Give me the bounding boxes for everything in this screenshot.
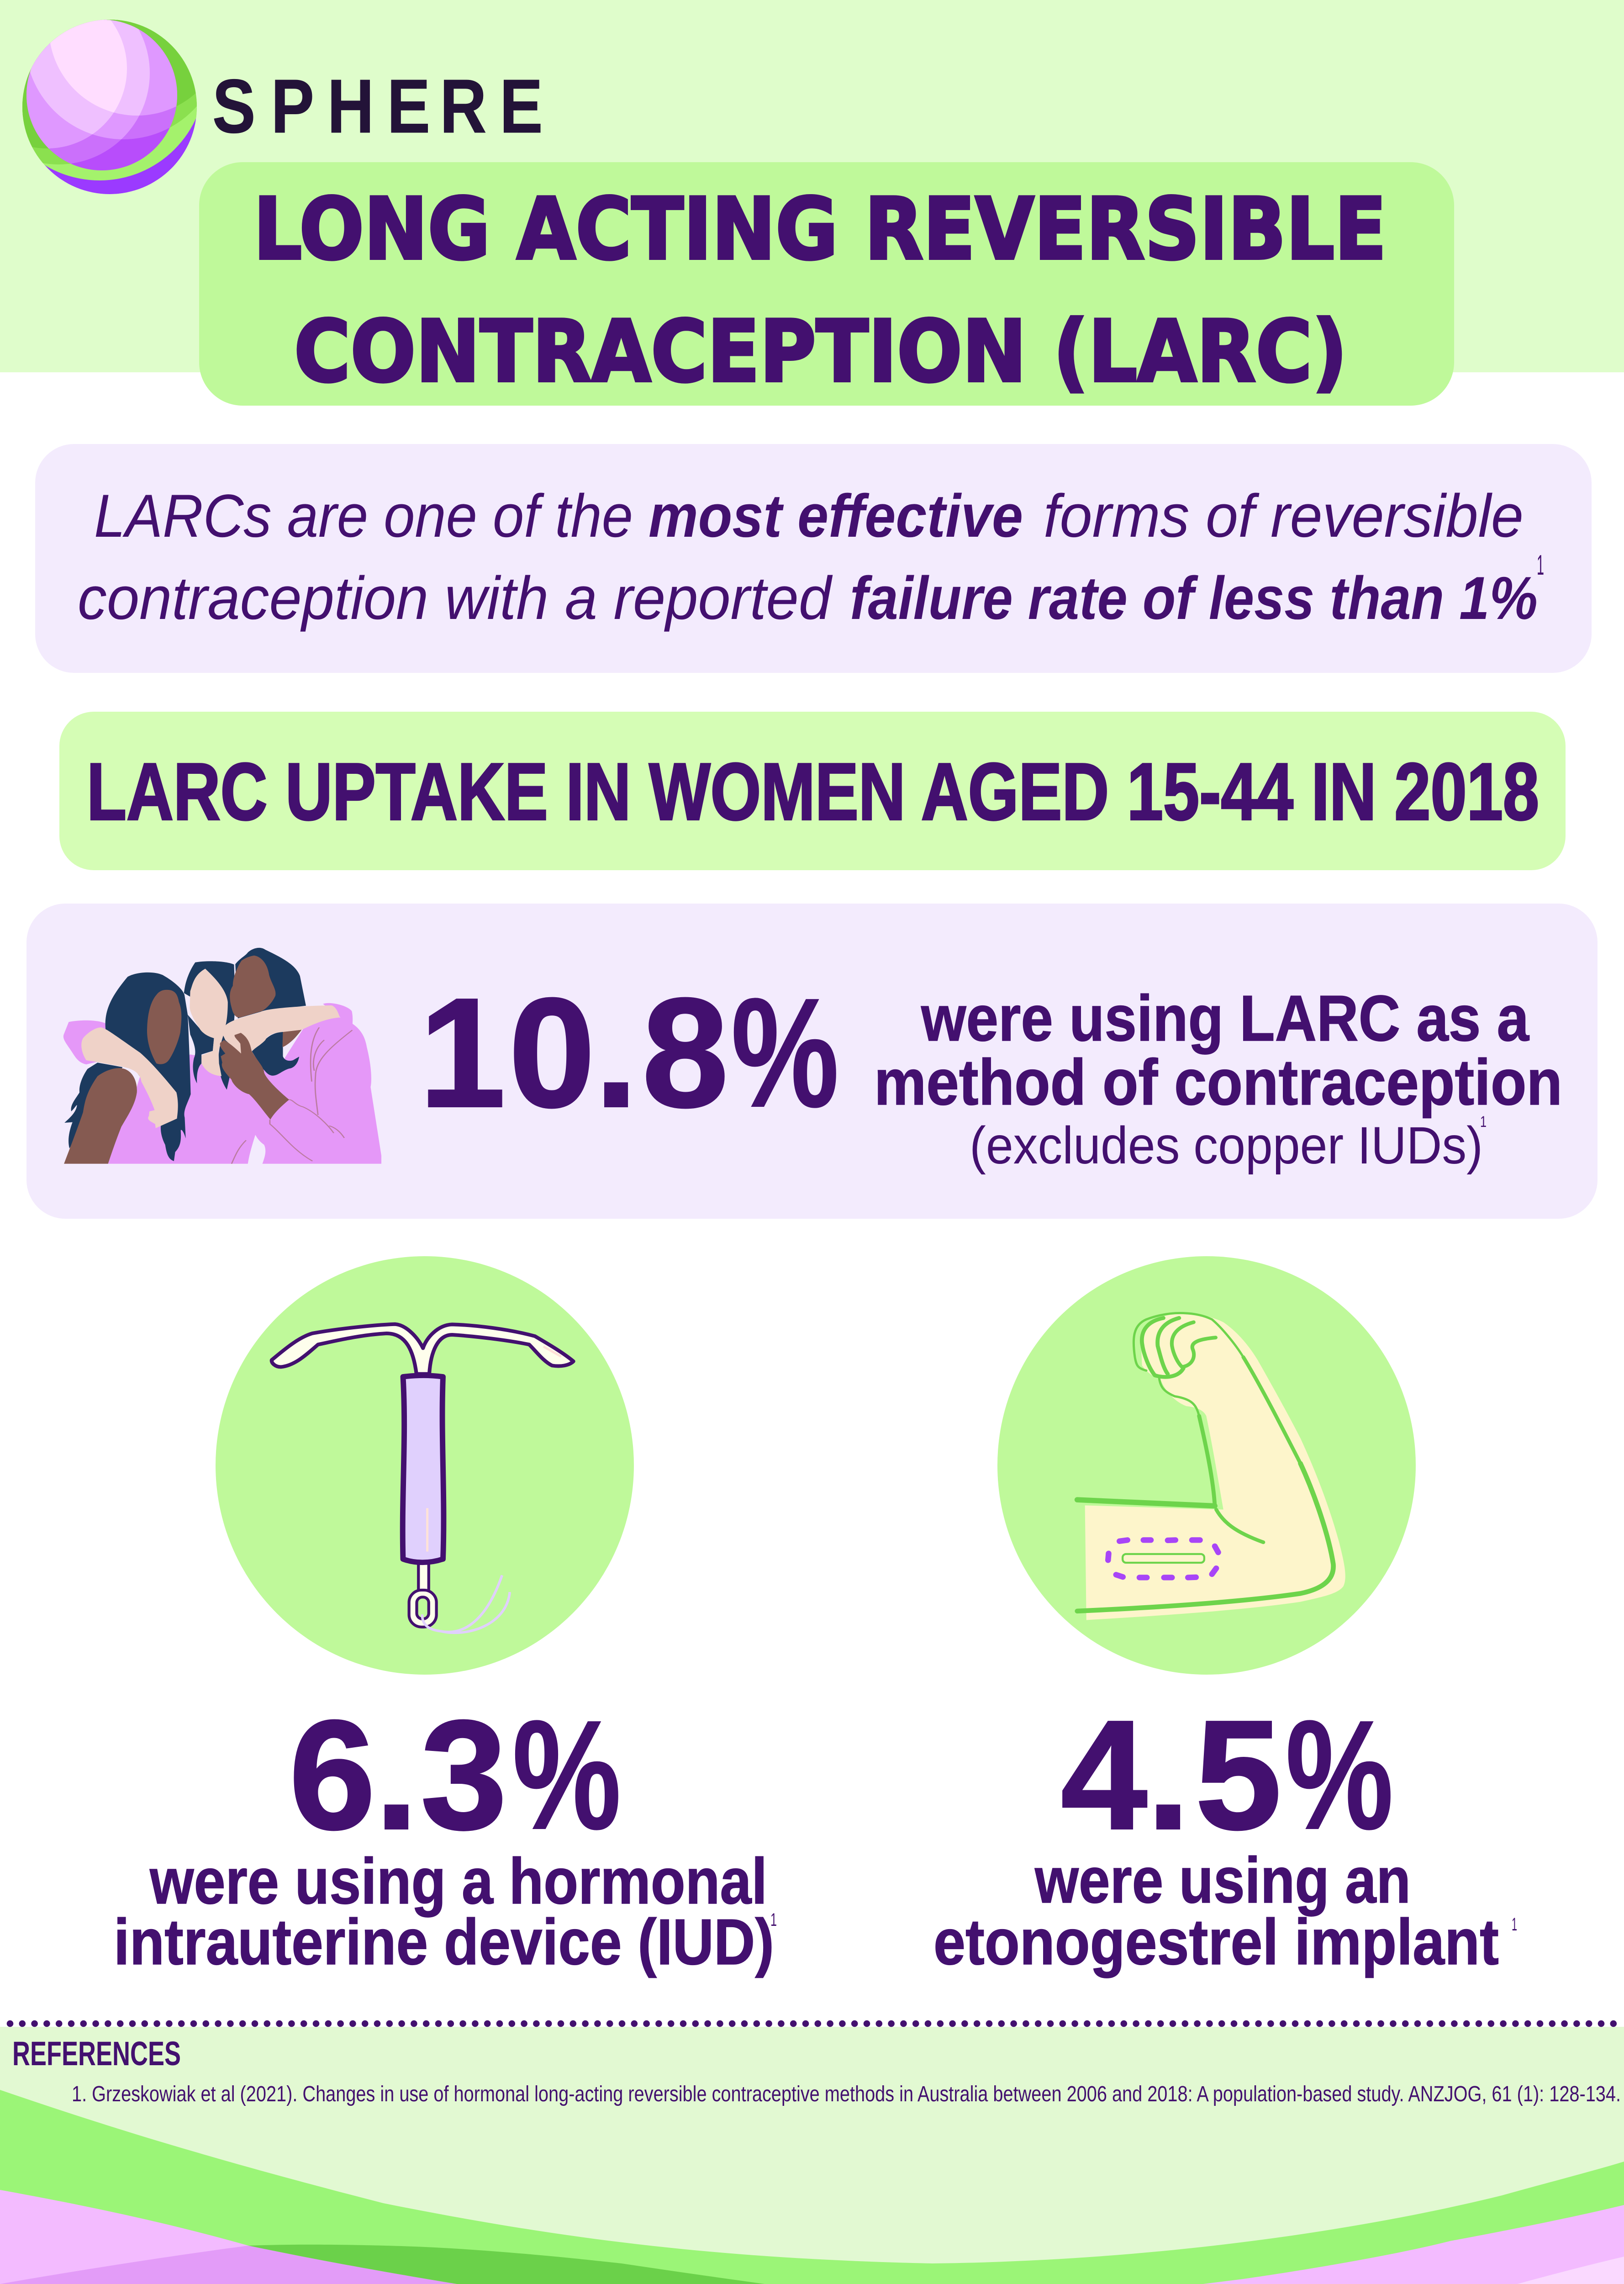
title panel (199, 162, 1454, 406)
description: implant (933, 1844, 1517, 1978)
statistic description: 1 (1480, 1113, 1487, 1131)
footer background waves (0, 2027, 1624, 2284)
panel: effectiveness statement (35, 444, 1592, 673)
title line 1: LONG ACTING REVERSIBLE (253, 180, 1387, 279)
statement line 1: forms of reversible (1044, 482, 1524, 550)
description: hormonal IUD: 1 (770, 1910, 777, 1930)
statistic: 10.8%: % (731, 966, 839, 1140)
value: 6.3% (289, 1688, 621, 1862)
references: REFERENCES (12, 2035, 181, 2073)
references (12, 2035, 1621, 2106)
value: 4.5% (1061, 1688, 1393, 1862)
statement line 1: LARCs are one of the (94, 482, 633, 550)
description: implant: 1 (1512, 1914, 1517, 1935)
statistic: implant (933, 1688, 1517, 1978)
value: 6.3%: 6.3 (289, 1688, 507, 1862)
logo: sphere (22, 20, 197, 194)
statement line 1: most effective (649, 482, 1023, 550)
description: hormonal IUD: were using a hormonal (149, 1845, 767, 1918)
statistic description: were using LARC as a (921, 982, 1529, 1055)
divider: dotted line (10, 2020, 1624, 2027)
statement line 2: contraception with a reported (78, 565, 833, 632)
panel: overall statistic (26, 904, 1598, 1219)
icon: arm with implant in circle (997, 1256, 1416, 1675)
statement line 1 (94, 482, 1524, 550)
icon: intrauterine device in circle (216, 1256, 634, 1675)
statement line 2 (78, 550, 1544, 632)
statement line 2: failure rate of less than 1% (850, 565, 1538, 632)
title line 2: CONTRACEPTION (LARC) (294, 302, 1347, 401)
value: 6.3%: % (512, 1688, 621, 1862)
header background band (0, 0, 1624, 372)
logo wordmark: SPHERE (212, 63, 543, 149)
description: hormonal IUD (114, 1845, 777, 1978)
value: 4.5%: 4.5 (1061, 1688, 1281, 1862)
panel: effectiveness statement: 1 (1537, 550, 1544, 581)
description: implant: etonogestrel implant (933, 1906, 1499, 1978)
statistic description (874, 982, 1562, 1175)
panel: uptake heading (59, 712, 1566, 870)
description: hormonal IUD: intrauterine device (IUD) (114, 1906, 774, 1978)
value: 4.5%: % (1286, 1688, 1393, 1862)
statistic description: method of contraception (874, 1046, 1562, 1119)
illustration: three women (63, 948, 381, 1164)
statistic: hormonal IUD (114, 1688, 777, 1978)
statistic description: (excludes copper IUDs) (970, 1116, 1483, 1175)
statistic: 10.8%: 10.8 (419, 966, 728, 1140)
description: implant: were using an (1034, 1844, 1411, 1917)
